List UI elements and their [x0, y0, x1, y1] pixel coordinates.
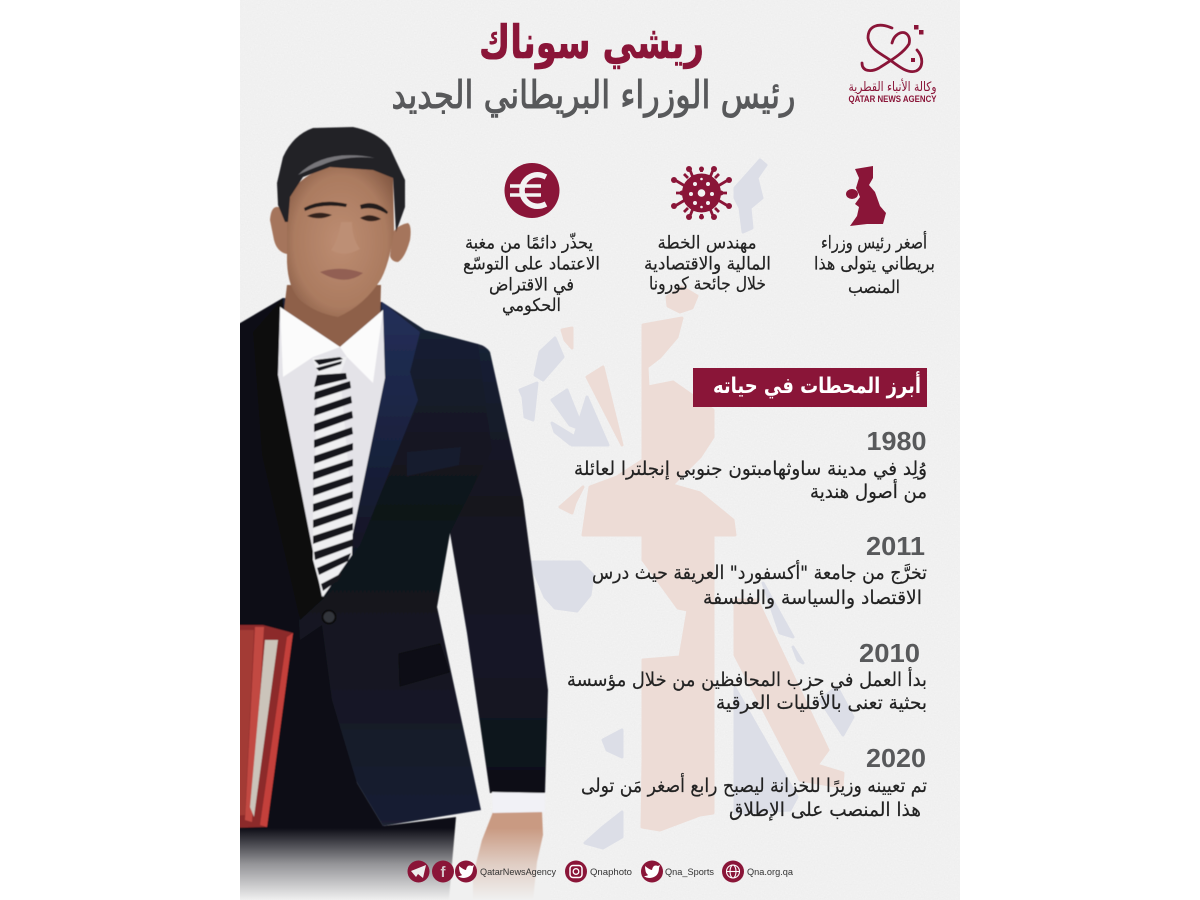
milestone 2010: [567, 638, 927, 714]
photo: Rishi Sunak: [230, 127, 550, 900]
text: architect of the covid plan: خلال جائحة كورونا: [649, 274, 766, 294]
lapel left: [253, 298, 324, 620]
eyes: [307, 213, 381, 221]
nose: [345, 222, 359, 251]
milestone 2020: 2020: [866, 743, 926, 773]
jacket sleeve: [450, 344, 548, 793]
text: architect of the covid plan: [644, 234, 771, 294]
milestone 1980: 1980: [866, 426, 926, 456]
milestone 2010: بحثية تعنى بالأقليات العرقية: [716, 691, 927, 714]
icon: coronavirus: [671, 166, 732, 220]
text: youngest prime minister: أصغر رئيس وزراء: [821, 230, 927, 254]
text: warns about borrowing: يحذّر دائمًا من مغبة: [465, 233, 593, 254]
text: warns about borrowing: الاعتماد على التوسّع: [463, 254, 600, 274]
text: architect of the covid plan: مهندس الخطة: [658, 234, 756, 254]
mouth: [320, 269, 363, 280]
icon: twitter: [455, 860, 477, 882]
text: architect of the covid plan: المالية والاقتصادية: [644, 254, 771, 274]
face: [287, 166, 394, 317]
milestone 1980: [574, 426, 927, 503]
milestone 2011: 2011: [866, 531, 925, 561]
shirt: [278, 307, 385, 597]
milestone 2011: تخرَّج من جامعة "أكسفورد" العريقة حيث درس: [592, 560, 927, 584]
milestone 1980: من أصول هندية: [810, 479, 927, 503]
red folder: [240, 624, 294, 829]
heading band: milestones: [693, 368, 927, 407]
eyebrows: [304, 202, 388, 214]
icon: website globe: [722, 860, 744, 882]
icon: UK map: [846, 166, 886, 226]
hair highlight: [298, 155, 375, 175]
tie: [312, 357, 353, 597]
text: youngest prime minister: [814, 230, 935, 298]
handle: Qna.org.qa: Qna.org.qa: [747, 867, 794, 878]
milestone 2011: [592, 531, 927, 609]
lapel right: [325, 302, 420, 598]
cuff: [492, 792, 545, 813]
logo: Qatar News Agency: QATAR NEWS AGENCY: [848, 94, 936, 104]
page background: [240, 0, 960, 900]
social media footer: [408, 860, 794, 882]
title: ريشي سوناك: [479, 15, 704, 69]
icon: telegram: [408, 860, 430, 882]
text: warns about borrowing: الحكومي: [502, 296, 561, 316]
heading band: milestones: أبرز المحطات في حياته: [713, 370, 921, 399]
trousers: [230, 620, 456, 900]
icon: instagram: [565, 860, 587, 882]
collar: [280, 307, 383, 383]
bottom fade: [240, 828, 550, 900]
icon: twitter: [641, 860, 663, 882]
milestone 2010: 2010: [859, 638, 920, 668]
icon: facebook: f: [440, 864, 446, 881]
logo: Qatar News Agency: وكالة الأنباء القطرية: [848, 78, 936, 95]
milestone 2020: [581, 743, 927, 821]
icon: facebook: [432, 860, 454, 882]
neck: [284, 285, 381, 348]
hair: [277, 127, 405, 232]
hand: [473, 812, 543, 900]
milestone 2020: هذا المنصب على الإطلاق: [729, 799, 921, 821]
milestone 2020: تم تعيينه وزيرًا للخزانة ليصبح رابع أصغر مَن تولى: [581, 773, 927, 797]
breast pocket: [407, 447, 461, 476]
subtitle: رئيس الوزراء البريطاني الجديد: [392, 73, 796, 118]
background map: union flag over Britain: [520, 160, 853, 848]
ears: [270, 207, 411, 262]
milestone 1980: وُلِد في مدينة ساوثهامبتون جنوبي إنجلترا لعائلة: [574, 458, 927, 481]
handle: QatarNewsAgency: QatarNewsAgency: [480, 867, 556, 878]
icon: euro coin: [504, 163, 560, 218]
logo: Qatar News Agency: [848, 25, 936, 104]
text: warns about borrowing: [463, 233, 600, 316]
milestone 2010: بدأ العمل في حزب المحافظين من خلال مؤسسة: [567, 667, 927, 691]
jacket button: [322, 610, 336, 624]
text: youngest prime minister: المنصب: [848, 278, 900, 298]
handle: Qnaphoto: Qnaphoto: [590, 867, 632, 878]
jacket: [230, 298, 492, 826]
text: youngest prime minister: بريطاني يتولى هذا: [814, 254, 935, 274]
text: warns about borrowing: في الاقتراض: [489, 276, 574, 296]
pocket flap: [399, 644, 449, 686]
milestone 2011: الاقتصاد والسياسة والفلسفة: [703, 587, 922, 609]
handle: Qna_Sports: Qna_Sports: [665, 867, 714, 878]
